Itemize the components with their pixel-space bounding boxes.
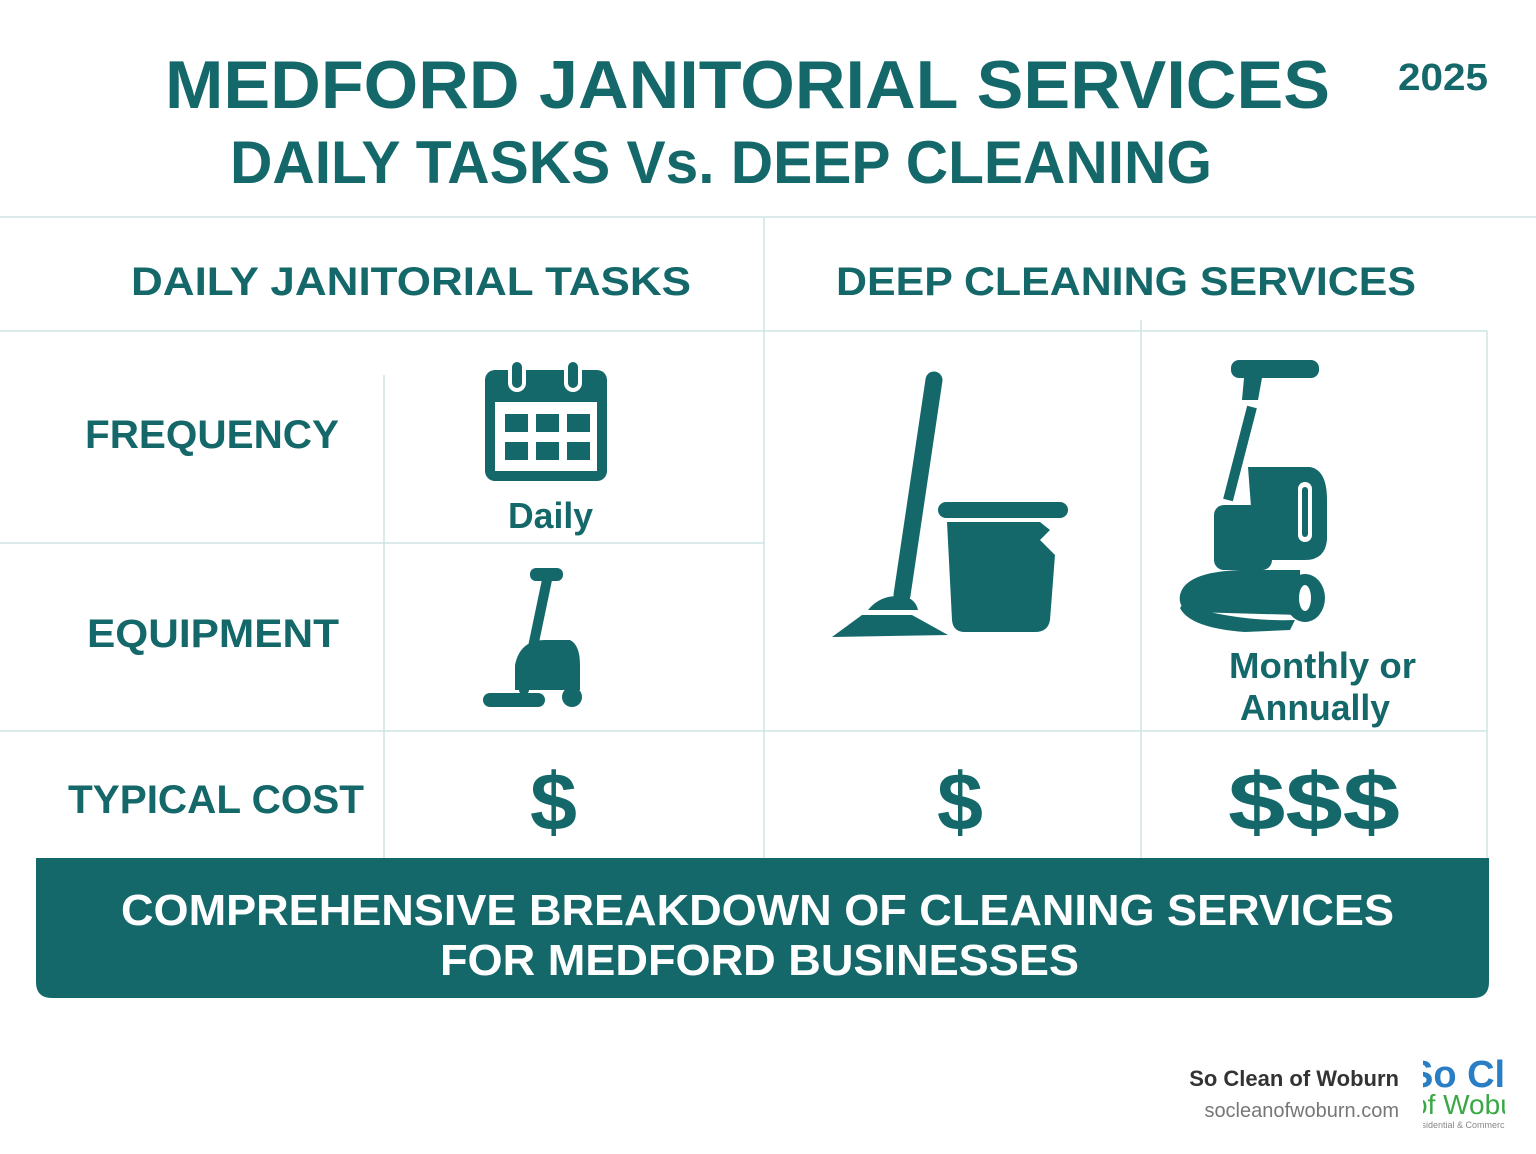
row label: frequency: FREQUENCY <box>85 413 339 457</box>
row label: equipment: EQUIPMENT <box>87 612 339 656</box>
banner <box>36 858 1489 998</box>
footer brand: socleanofwoburn.com <box>1204 1100 1399 1122</box>
footer brand: So Clean of Woburn <box>1189 1066 1399 1091</box>
banner: FOR MEDFORD BUSINESSES <box>440 936 1079 985</box>
title <box>165 47 1330 196</box>
cost: deep cleaning machine: $$$ <box>1228 757 1400 848</box>
cost: deep cleaning broom: $ <box>937 757 983 848</box>
icon: broom and bucket <box>832 380 1068 637</box>
text: monthly or annually <box>1229 645 1416 728</box>
banner: COMPREHENSIVE BREAKDOWN OF CLEANING SERVICES <box>121 886 1394 935</box>
heading: deep cleaning: DEEP CLEANING SERVICES <box>836 260 1416 304</box>
title: DAILY TASKS Vs. DEEP CLEANING <box>230 129 1212 196</box>
icon: calendar <box>485 360 607 481</box>
year: 2025 <box>1398 57 1488 99</box>
text: monthly or annually: Monthly or <box>1229 645 1416 686</box>
title: MEDFORD JANITORIAL SERVICES <box>165 47 1330 123</box>
footer brand <box>1189 1066 1399 1122</box>
text: daily: Daily <box>508 495 593 536</box>
logo: Residential & Commercial <box>1410 1120 1514 1130</box>
cost: daily: $ <box>530 757 577 848</box>
heading: daily tasks: DAILY JANITORIAL TASKS <box>131 260 691 304</box>
icon: vacuum <box>483 568 582 707</box>
logo <box>1423 1060 1505 1128</box>
text: monthly or annually: Annually <box>1240 687 1390 728</box>
icon: floor buffer <box>1180 360 1327 632</box>
row label: typical cost: TYPICAL COST <box>68 778 364 822</box>
